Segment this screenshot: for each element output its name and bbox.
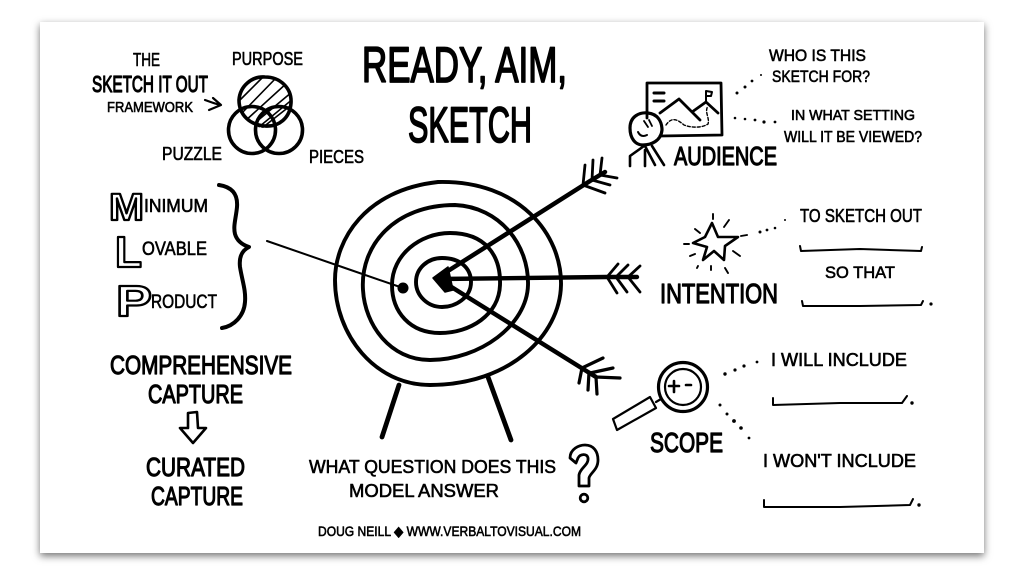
title: READY, AIM, xyxy=(362,37,567,93)
lovable: OVABLE xyxy=(142,239,207,260)
curly brace xyxy=(219,185,249,328)
target centre dot xyxy=(398,282,408,294)
scope prompt 1 xyxy=(771,350,914,405)
comprehensive capture: CAPTURE xyxy=(148,379,243,409)
intention prompt 1: TO SKETCH OUT xyxy=(800,206,922,226)
scope label: SCOPE xyxy=(650,427,723,458)
arrow: upper xyxy=(440,158,617,276)
target with arrows xyxy=(335,158,640,440)
product xyxy=(116,277,217,326)
venn labels xyxy=(162,49,364,167)
person icon xyxy=(630,113,664,166)
curated capture xyxy=(146,452,245,511)
panel: sketch it out framework xyxy=(92,49,364,167)
audience question 2 xyxy=(784,107,922,146)
dots: to sketch out xyxy=(758,219,786,234)
arrow to venn diagram xyxy=(205,98,221,110)
minimum: M xyxy=(109,187,144,229)
minimum: INIMUM xyxy=(144,196,208,216)
picture frame with mountains xyxy=(647,83,722,136)
audience question 2: IN WHAT SETTING xyxy=(791,107,915,124)
down arrow xyxy=(180,412,206,443)
dots: won't include xyxy=(718,404,750,439)
title xyxy=(362,37,567,153)
framework heading: FRAMEWORK xyxy=(107,99,193,116)
question caption xyxy=(309,457,556,501)
venn labels: PURPOSE xyxy=(232,49,303,69)
icon: star xyxy=(684,214,747,273)
panel: intention xyxy=(660,206,933,309)
intention prompt 2 xyxy=(802,263,933,306)
arrowhead cluster xyxy=(433,267,453,292)
arrow: lower xyxy=(445,283,620,394)
intention label: INTENTION xyxy=(660,278,778,309)
footer credit: DOUG NEILL ◆ WWW.VERBALTOVISUAL.COM xyxy=(318,523,581,539)
pointer line to target xyxy=(267,241,403,288)
product: RODUCT xyxy=(151,292,217,313)
intention prompt 1 xyxy=(800,206,922,251)
curated capture: CAPTURE xyxy=(151,481,243,511)
curated capture: CURATED xyxy=(146,452,245,482)
panel: audience xyxy=(630,46,922,171)
dots: setting xyxy=(734,117,776,124)
arrow: middle xyxy=(440,264,640,293)
minimum xyxy=(109,187,208,229)
question caption: WHAT QUESTION DOES THIS xyxy=(309,457,556,477)
title: SKETCH xyxy=(408,97,532,153)
dots: will include xyxy=(723,361,758,376)
venn diagram xyxy=(228,76,302,154)
lovable xyxy=(115,228,207,277)
dots: who xyxy=(736,74,762,94)
scope prompt 2: I WON'T INCLUDE xyxy=(763,451,916,471)
audience question 1 xyxy=(769,46,870,86)
comprehensive capture xyxy=(110,350,292,409)
panel: minimum lovable product xyxy=(109,185,249,328)
venn labels: PUZZLE xyxy=(162,144,222,164)
framework heading xyxy=(92,50,208,116)
panel: scope xyxy=(613,350,921,507)
scope prompt 2 xyxy=(763,451,921,507)
target legs xyxy=(382,377,511,440)
product: P xyxy=(116,277,152,326)
framework heading: THE xyxy=(133,50,160,70)
intention prompt 2: SO THAT xyxy=(825,263,895,282)
audience question 1: WHO IS THIS xyxy=(769,46,866,65)
icon: magnifying glass xyxy=(613,362,708,430)
comprehensive capture: COMPREHENSIVE xyxy=(110,350,292,380)
audience question 1: SKETCH FOR? xyxy=(772,67,870,86)
lovable: L xyxy=(115,228,142,277)
panel: comprehensive to curated capture xyxy=(110,350,292,511)
question caption: MODEL ANSWER xyxy=(349,481,499,501)
framework heading: SKETCH IT OUT xyxy=(92,71,208,97)
target rings xyxy=(335,182,561,385)
icon: question mark xyxy=(570,445,598,502)
venn labels: PIECES xyxy=(309,147,364,167)
audience question 2: WILL IT BE VIEWED? xyxy=(784,129,922,146)
scope prompt 1: I WILL INCLUDE xyxy=(771,350,907,370)
audience label: AUDIENCE xyxy=(674,141,777,171)
